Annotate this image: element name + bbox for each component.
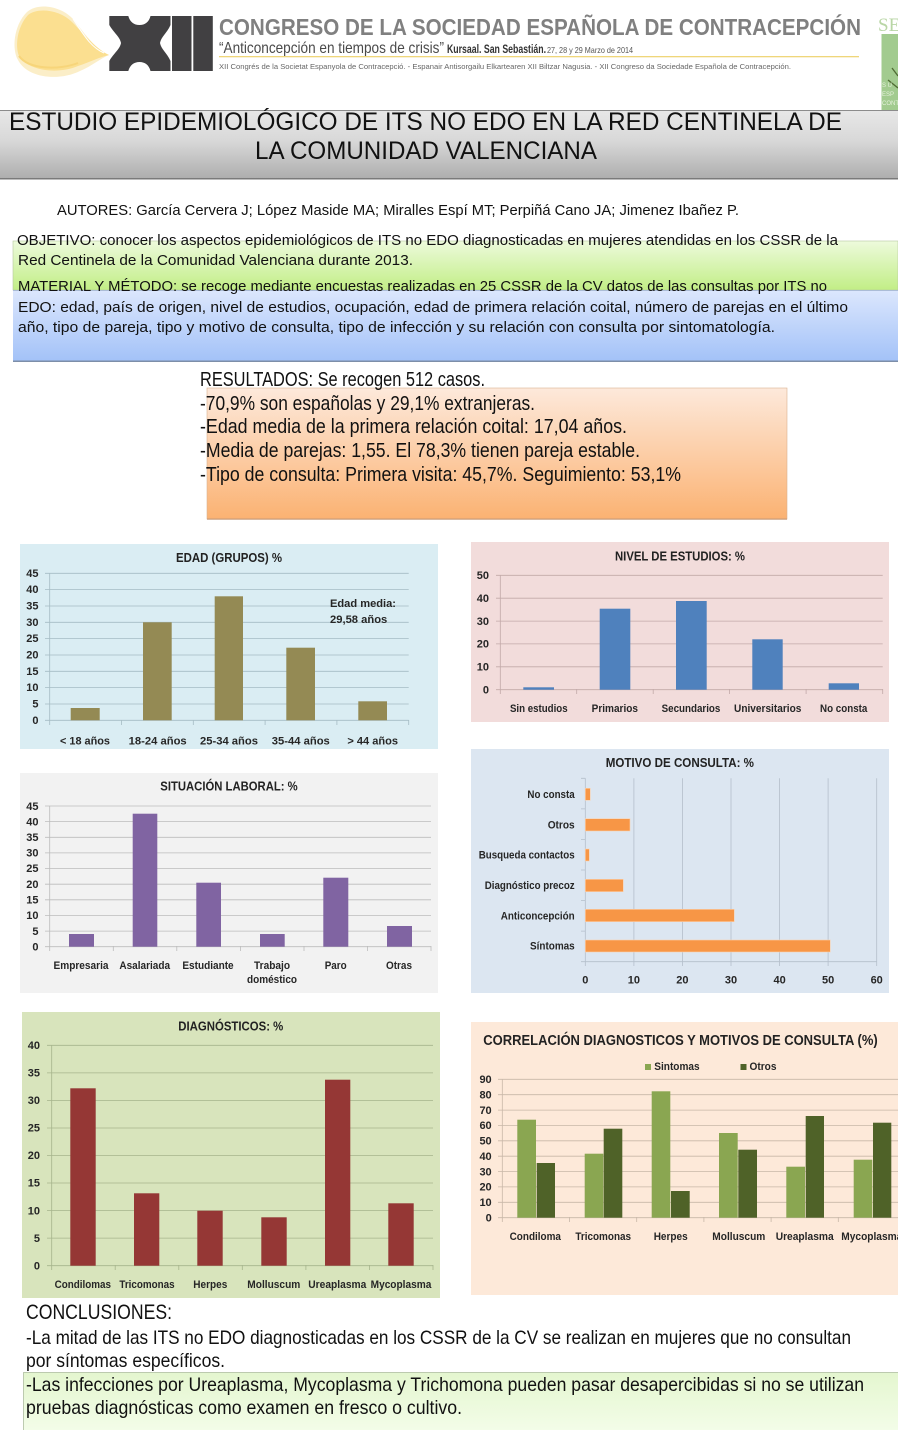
y axis: education: 30 <box>477 616 489 628</box>
y axis: employment: 10 <box>26 910 38 922</box>
y axis: employment: 5 <box>32 926 38 938</box>
x axis: reason: 30 <box>725 974 737 986</box>
heading: education: NIVEL DE ESTUDIOS: % <box>615 550 745 564</box>
legend: Sintomas <box>654 1061 700 1073</box>
bars: diagnoses <box>70 1080 414 1266</box>
objective text: OBJETIVO: conocer los aspectos epidemiológicos de ITS no EDO diagnosticadas en mujeres atendidas en los CSSR de la <box>17 232 839 249</box>
title line 2: LA COMUNIDAD VALENCIANA <box>255 137 597 165</box>
y axis: age <box>26 568 38 727</box>
method text: MATERIAL Y MÉTODO: se recoge mediante encuestas realizadas en 25 CSSR de la CV datos de las consultas por ITS no <box>18 278 827 295</box>
authors: AUTORES: García Cervera J; López Maside MA; Miralles Espí MT; Perpiñá Cano JA; Jimenez Ibañez P. <box>57 202 739 219</box>
callout: mean age: 29,58 años <box>330 614 387 626</box>
y axis: diagnoses: 5 <box>34 1233 40 1245</box>
y axis: employment: 40 <box>26 816 38 828</box>
x labels: diagnoses: Mycoplasma <box>371 1279 432 1291</box>
y labels: reason: No consta <box>527 789 575 801</box>
conclusion 2 <box>26 1374 864 1419</box>
panel: objective and method <box>13 232 898 362</box>
y axis: age: 45 <box>26 568 38 580</box>
x labels: correlation <box>510 1231 898 1243</box>
y axis: employment: 25 <box>26 863 38 875</box>
panel: employment chart <box>20 773 438 993</box>
x axis: reason: 40 <box>773 974 786 986</box>
y axis: employment: 20 <box>26 879 38 891</box>
x labels: diagnoses <box>55 1279 432 1291</box>
x labels: employment: Otras <box>386 960 412 972</box>
x labels: employment: Estudiante <box>182 960 234 972</box>
panel: correlation chart <box>471 1022 898 1295</box>
x labels: diagnoses: Ureaplasma <box>308 1279 367 1291</box>
x labels: employment: doméstico <box>247 974 297 986</box>
y axis: diagnoses: 15 <box>28 1178 40 1190</box>
bars: other reasons <box>537 1116 891 1218</box>
y axis: education <box>477 570 489 696</box>
conclusion 2: pruebas diagnósticas como examen en fresco o cultivo. <box>26 1397 462 1419</box>
y axis: correlation: 10 <box>479 1197 492 1209</box>
y axis: diagnoses: 0 <box>34 1260 40 1272</box>
x axis: reason <box>582 974 883 986</box>
y axis: correlation: 80 <box>479 1089 492 1101</box>
y axis: employment: 0 <box>32 942 38 954</box>
congress header <box>15 6 898 110</box>
congress dates: 27, 28 y 29 Marzo de 2014 <box>547 45 633 55</box>
heading: reason: MOTIVO DE CONSULTA: % <box>606 756 754 770</box>
objective text: Red Centinela de la Comunidad Valenciana durante 2013. <box>18 252 413 269</box>
y axis: education: 0 <box>483 684 489 696</box>
results text: -Edad media de la primera relación coital: 17,04 años. <box>200 416 627 438</box>
congress venue: Kursaal. San Sebastián. <box>447 42 546 56</box>
x labels: age: 35-44 años <box>272 736 330 748</box>
y axis: age: 10 <box>26 682 38 694</box>
x labels: employment: Trabajo <box>254 960 290 972</box>
x labels: correlation: Molluscum <box>712 1231 765 1243</box>
y axis: age: 20 <box>26 650 38 662</box>
legend <box>645 1061 776 1073</box>
bars: employment <box>69 814 412 947</box>
x labels: diagnoses: Herpes <box>193 1279 227 1291</box>
objective text <box>17 232 839 269</box>
results text <box>200 369 681 486</box>
y axis: age: 40 <box>26 584 38 596</box>
x labels: employment: Empresaria <box>54 960 109 972</box>
title line 1: ESTUDIO EPIDEMIOLÓGICO DE ITS NO EDO EN LA RED CENTINELA DE <box>9 107 842 136</box>
x axis: reason: 50 <box>822 974 834 986</box>
y axis: age: 5 <box>32 698 38 710</box>
y axis: education: 40 <box>477 593 489 605</box>
y axis: education: 50 <box>477 570 489 582</box>
y axis: correlation: 20 <box>479 1182 492 1194</box>
x labels: education: Universitarios <box>734 703 801 715</box>
x labels: education: Sin estudios <box>510 703 568 715</box>
heading: employment: SITUACIÓN LABORAL: % <box>160 779 298 794</box>
x axis: reason: 10 <box>628 974 640 986</box>
y axis: correlation: 30 <box>479 1166 492 1178</box>
y axis: diagnoses <box>28 1040 40 1272</box>
x labels: diagnoses: Condilomas <box>55 1279 111 1291</box>
y axis: correlation: 70 <box>479 1105 492 1117</box>
y axis: age: 25 <box>26 633 38 645</box>
x axis: reason: 0 <box>582 974 588 986</box>
bars: education <box>523 601 859 690</box>
x labels: diagnoses: Molluscum <box>247 1279 300 1291</box>
bars: age <box>71 596 387 720</box>
x axis: reason: 20 <box>676 974 689 986</box>
panel: reason for consultation chart <box>471 749 889 993</box>
x labels: age: 18-24 años <box>129 736 187 748</box>
y axis: employment: 45 <box>26 801 38 813</box>
conclusions heading: CONCLUSIONES: <box>26 1300 172 1324</box>
icon: yellow speech-drop logo <box>15 6 109 77</box>
y axis: diagnoses: 25 <box>28 1123 40 1135</box>
y labels: reason: Anticoncepción <box>501 910 575 922</box>
heading: age: EDAD (GRUPOS) % <box>176 551 282 565</box>
x labels: employment <box>54 960 412 986</box>
congress multilingual line: XII Congrés de la Societat Espanyola de Contracepció. - Espanair Antisorgailu Elkartearen XII Biltzar Nagusia. - XII Congreso da Sociedade Española de Contracepción. <box>219 62 791 71</box>
x labels: age: > 44 años <box>347 736 398 748</box>
y labels: reason: Otros <box>548 819 575 831</box>
y axis: diagnoses: 20 <box>28 1150 40 1162</box>
panel: conclusions <box>24 1300 898 1430</box>
x labels: age: < 18 años <box>60 736 110 748</box>
conclusion 1 <box>26 1327 851 1372</box>
legend: Otros <box>750 1061 776 1073</box>
title band <box>0 107 898 180</box>
x labels: education: Secundarios <box>662 703 720 715</box>
heading: diagnoses: DIAGNÓSTICOS: % <box>178 1018 283 1034</box>
y axis: employment: 30 <box>26 848 38 860</box>
callout: mean age: Edad media: <box>330 598 396 610</box>
y axis: education: 20 <box>477 638 489 650</box>
y axis: diagnoses: 40 <box>28 1040 40 1052</box>
y labels: reason: Diagnóstico precoz <box>485 880 575 892</box>
results text: -Media de parejas: 1,55. El 78,3% tienen pareja estable. <box>200 440 640 462</box>
callout: mean age <box>330 598 396 626</box>
panel: diagnoses chart <box>22 1012 440 1298</box>
x labels: age <box>60 736 398 748</box>
x axis: reason: 60 <box>871 974 883 986</box>
congress subtitle: “Anticoncepción en tiempos de crisis” <box>219 40 444 57</box>
y axis: correlation: 90 <box>479 1074 492 1086</box>
y labels: reason: Busqueda contactos <box>479 850 575 862</box>
y axis: correlation: 0 <box>486 1212 492 1224</box>
results text: -Tipo de consulta: Primera visita: 45,7%. Seguimiento: 53,1% <box>200 464 681 486</box>
society logo <box>878 15 898 110</box>
society logo: ESP <box>882 92 894 98</box>
y axis: employment <box>26 801 38 954</box>
y labels: reason: Síntomas <box>530 941 575 953</box>
y axis: employment: 15 <box>26 894 38 906</box>
x labels: education <box>510 703 868 715</box>
bars: reason <box>585 788 830 952</box>
method text <box>18 278 848 336</box>
method text: año, tipo de pareja, tipo y motivo de consulta, tipo de infección y su relación con consulta por sintomatología. <box>18 319 775 336</box>
y axis: employment: 35 <box>26 832 38 844</box>
y axis: age: 15 <box>26 666 38 678</box>
y axis: education: 10 <box>477 662 489 674</box>
x labels: education: Primarios <box>592 703 638 715</box>
panel: education chart <box>471 542 889 722</box>
x labels: correlation: Ureaplasma <box>776 1231 835 1243</box>
bars: symptoms <box>517 1091 872 1218</box>
y axis: correlation: 50 <box>479 1136 492 1148</box>
y axis: diagnoses: 30 <box>28 1095 40 1107</box>
results text: -70,9% son españolas y 29,1% extranjeras. <box>200 393 535 415</box>
x labels: correlation: Tricomonas <box>575 1231 631 1243</box>
y axis: diagnoses: 10 <box>28 1205 40 1217</box>
y axis: age: 0 <box>32 715 38 727</box>
panel: results <box>200 369 787 520</box>
y axis: correlation: 60 <box>479 1120 492 1132</box>
x labels: correlation: Condiloma <box>510 1231 562 1243</box>
x labels: diagnoses: Tricomonas <box>119 1279 175 1291</box>
conclusion 1: por síntomas específicos. <box>26 1350 225 1372</box>
y axis: age: 35 <box>26 600 38 612</box>
method text: EDO: edad, país de origen, nivel de estudios, ocupación, edad de primera relación coital, número de parejas en el último <box>18 299 848 316</box>
x labels: correlation: Herpes <box>654 1231 688 1243</box>
icon: XII roman numeral <box>109 16 213 71</box>
y axis: age: 30 <box>26 617 38 629</box>
y axis: correlation: 40 <box>479 1151 492 1163</box>
panel: age chart <box>20 544 438 749</box>
y axis: correlation <box>479 1074 492 1224</box>
y axis: diagnoses: 35 <box>28 1068 40 1080</box>
y labels: reason <box>479 789 575 953</box>
results text: RESULTADOS: Se recogen 512 casos. <box>200 369 485 391</box>
x labels: employment: Asalariada <box>119 960 171 972</box>
society logo: S U <box>882 83 892 89</box>
x labels: education: No consta <box>820 703 868 715</box>
x labels: employment: Paro <box>325 960 347 972</box>
x labels: age: 25-34 años <box>200 736 258 748</box>
